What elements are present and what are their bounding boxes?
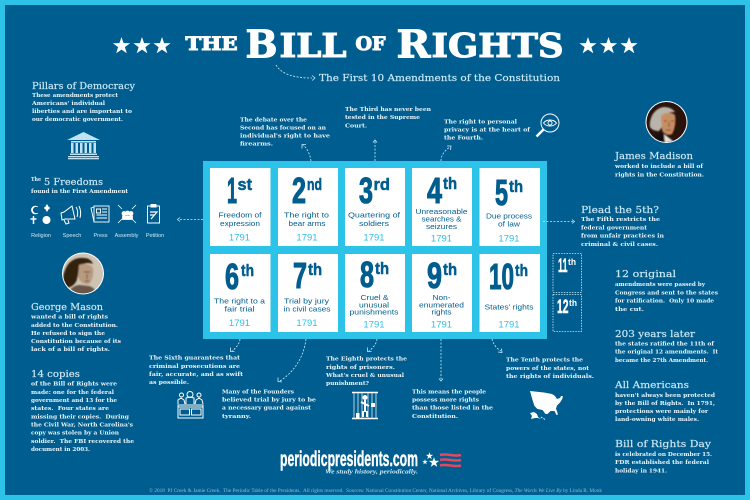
panel: George Mason: wanted a bill of rights [30,314,108,320]
card: 1st: 1 [227,170,237,211]
freedom labels [31,233,164,239]
arrow: first amendment to freedoms [178,218,203,222]
panel: James Madison: rights in the Constitution. [615,172,704,178]
card: 8th [345,254,405,332]
note: Sixth: fair, accurate, and as swift [149,372,243,378]
card: 8th: 1791 [363,320,385,330]
box: 12th: 12 [557,297,568,318]
card: 2nd: 2 [292,170,306,211]
freedom labels: Press [93,233,108,239]
panel: 12 original: 12 original [615,270,676,280]
panel: 12 original: amendments were passed by [615,282,706,288]
box: 11th [553,254,582,292]
card: 7th [278,254,338,332]
note: Ninth: Constitution. [412,414,458,420]
card: 9th: 1791 [431,320,452,330]
panel: 12 original: Congress and sent to the states [615,290,718,296]
panel: All Americans [614,381,715,423]
panel: 14 copies [31,370,134,453]
title: THE [186,33,238,55]
arrow: Fifth [543,220,574,224]
icon: prison cell [352,392,378,418]
note: Fourth [444,120,531,142]
panel: pillars of democracy: our democratic government. [32,117,123,123]
panel: 14 copies: government and 13 for the [31,398,117,404]
panel: George Mason: Constitution because of its [31,339,121,345]
panel: pillars of democracy: liberties and are important to [32,109,132,115]
card: 4th: 4 [427,170,442,211]
note: Seventh [222,390,316,420]
panel: 5 freedoms: 5 Freedoms [44,178,103,188]
card: 5th [480,168,540,246]
box: 12th [553,294,582,332]
title: B [246,22,278,66]
note: Eighth: The Eighth protects the [326,356,407,362]
card: 8th: punishments [350,308,399,317]
card: 1st: 1791 [229,232,250,244]
icon: religion [30,204,50,224]
panel: 14 copies: states. Four states are [31,406,109,412]
panel: Plead the 5th: criminal & civil cases. [581,242,658,248]
card: 2nd: nd [307,175,322,194]
footer credits: © 2018 PJ Creek & Jamie Creek. The Periodic Table of the Presidents. All rights reserved. Sources: National Constitution Center, National Archives, Library of Congress, The Words We Live By by Linda R. Monk [149,487,602,494]
arrow: Eighth [368,339,377,352]
panel: Plead the 5th: from unfair practices in [581,234,664,240]
card: 10th: 10 [489,256,514,297]
panel: 14 copies: document in 2003. [31,447,90,453]
logo [280,448,461,476]
card: 4th [412,168,472,246]
panel: George Mason: added to the Constitution. [31,323,118,329]
panel: 203 years later [615,330,718,364]
freedom labels: Assembly [115,233,139,239]
note: Fourth: privacy is at the heart of [444,128,531,134]
card: 4th: searches & [422,214,462,224]
title: OF [356,33,386,55]
arrow: Seventh [278,339,306,382]
card: 9th: rights [432,308,452,317]
panel: George Mason: lack of a bill of rights. [31,347,110,353]
card: 3rd: 3 [359,170,373,211]
logo stripes [440,454,461,466]
card: 7th: 7 [293,255,307,296]
panel: Bill of Rights Day [615,440,712,474]
note: Seventh: tyranny. [222,414,251,420]
card: 6th: 1791 [229,318,250,329]
panel: 12 original: for ratification. Only 10 made [615,298,714,304]
card: 5th: of law [498,220,521,229]
portrait: George Mason [62,252,104,296]
note: Eighth: rights of prisoners. [326,365,395,371]
card: 1st: st [238,175,252,194]
card: 10th: States' rights [484,302,534,312]
card: 6th: 6 [225,256,239,297]
card: 9th: enumerated [419,300,464,309]
note: Ninth: possess more rights [412,398,479,404]
card: 2nd: 1791 [296,232,318,244]
panel: pillars of democracy [31,82,136,123]
note: Sixth [149,356,243,386]
panel: pillars of democracy: Pillars of Democracy [32,82,136,92]
panel: Bill of Rights Day: FDR established the federal [615,460,710,466]
panel: pillars of democracy: Americans' individual [31,101,106,107]
arrow: Ninth [439,339,443,381]
arrow: Third [373,140,377,161]
panel: All Americans: by the Bill of Rights. In 1791, [615,401,715,407]
card: 10th [480,254,540,332]
card: 2nd: The right to [284,210,329,220]
card: 3rd: rd [374,175,390,194]
note: Ninth: This means the people [412,390,486,396]
panel: All Americans: protections were mainly for [615,409,709,415]
card: 6th: th [241,261,254,280]
panel: amendments table [203,161,547,339]
note: Sixth: as possible. [149,380,189,386]
card: 2nd [278,168,338,246]
note: Tenth [506,358,594,380]
card: 6th: The right to a [214,296,266,306]
logo: We study history, periodically. [325,468,418,476]
note: Ninth: than those listed in the [412,406,493,412]
card: 1st: expression [220,219,260,228]
freedom labels: Petition [146,233,164,239]
panel: 12 original [615,270,718,313]
panel: Bill of Rights Day: is celebrated on December 15. [615,452,712,458]
logo stars [422,452,439,467]
icon: press [91,206,109,222]
note: Second: individual's right to have [240,134,330,140]
freedom labels: Speech [63,233,81,239]
icon: speech [61,206,81,224]
freedom labels: Religion [31,233,51,239]
portrait: James Madison [646,101,688,143]
note: Sixth: The Sixth guarantees that [149,356,240,362]
panel: Bill of Rights Day: holiday in 1941. [615,468,667,474]
panel: James Madison [614,152,704,178]
icon: temple [67,132,100,159]
card: 7th: th [308,260,322,279]
note: Seventh: believed trial by jury to be [222,398,316,404]
note: Sixth: criminal prosecutions are [149,364,240,370]
panel: 14 copies: the Civil War, North Carolina's [31,422,133,428]
note: Ninth [412,390,493,420]
card: 8th: unusual [359,300,389,309]
note: Third: Court. [345,124,367,130]
panel: 5 freedoms [30,177,164,239]
panel: 14 copies: 14 copies [31,370,80,380]
panel: 5 freedoms: The [31,177,41,183]
card: 4th: 1791 [431,234,452,244]
arrow: Fourth [441,146,451,161]
panel: James Madison: worked to include a bill of [614,164,704,170]
title [113,22,638,66]
card: 2nd: bear arms [288,219,326,228]
panel: George Mason: George Mason [31,303,103,313]
note: Second: Second has focused on an [240,126,326,132]
card: 5th: 5 [495,172,508,213]
note: Eighth [325,356,407,387]
panel: 14 copies: missing their copies. During [31,414,129,420]
panel: James Madison: James Madison [614,152,693,162]
panel: George Mason: He refused to sign the [31,331,105,337]
card: 7th: 1791 [296,318,318,329]
panel: 203 years later: became the 27th Amendment. [615,358,708,364]
icon: petition [148,204,160,223]
note: Tenth: the rights of individuals. [506,374,594,380]
icon: assembly [118,205,136,223]
note: Seventh: Many of the Founders [222,390,294,396]
card: 6th: fair trial [224,304,255,314]
panel: 14 copies: copy was stolen by a Union [31,430,119,436]
card: 9th [412,254,472,332]
card: 3rd [345,168,405,246]
note: Third [345,107,431,130]
card: 3rd: 1791 [363,232,385,244]
box: 12th: th [569,298,577,308]
box: 11th: th [568,257,576,267]
title: IGHTS [432,26,564,65]
card: 6th [210,254,270,332]
arrow: Sixth [230,339,240,352]
title: ILL [280,26,346,65]
panel: 14 copies: soldier. The FBI recovered the [31,439,134,445]
note: Third: tested in the Supreme [345,115,420,121]
panel: Bill of Rights Day: Bill of Rights Day [615,440,712,450]
note: Third: The Third has never been [345,107,431,113]
note: Second [240,118,330,148]
note: Eighth: punishment? [326,381,370,387]
card: 7th: Trial by jury [284,296,329,306]
card: 9th: Non- [432,293,451,302]
panel: All Americans: land-owning white males. [615,417,699,423]
card: 10th: 1791 [498,320,520,330]
card: 9th: 9 [427,255,442,296]
panel: Plead the 5th [581,206,664,248]
panel: 203 years later: the states ratified the 11th of [615,342,715,348]
note: Tenth: powers of the states, not [506,366,589,372]
card: 8th: th [375,259,389,278]
icon: magnifier eye [536,114,559,136]
panel: All Americans: All Americans [614,381,689,391]
card: 4th: Unreasonable [416,207,468,216]
logo: periodicpresidents.com [280,448,418,471]
panel: All Americans: haven't always been protected [615,393,715,399]
panel: George Mason [30,303,121,353]
title: R [396,22,431,66]
note: Tenth: The Tenth protects the [506,358,583,364]
note: Fourth: The right to personal [444,120,518,126]
card: 10th: th [515,261,528,280]
note: Second: The debate over the [240,118,307,124]
card: 8th: Cruel & [360,293,389,302]
icon: jury [178,392,203,418]
card: 9th: th [443,260,457,279]
icon: USA map [530,391,563,420]
card: 4th: th [443,174,457,193]
card: 7th: in civil cases [284,304,331,314]
panel: 12 original: the cut. [615,307,644,313]
card: 8th: 8 [360,254,374,295]
note: Seventh: a necessary guard against [222,406,311,412]
left stars [113,37,171,53]
card: 5th: th [509,177,523,196]
panel: Plead the 5th: federal government [581,226,647,232]
note: Second: firearms. [240,142,273,148]
panel: 5 freedoms: found in the First Amendment [31,189,128,195]
panel: pillars of democracy: These amendments protect [32,93,118,99]
panel: Plead the 5th: Plead the 5th? [581,206,659,216]
card: 4th: seizures [426,222,457,231]
subtitle: The First 10 Amendments of the Constitution [319,74,560,84]
box: 11th: 11 [558,256,568,277]
card: 1st [210,168,270,246]
card: 5th: 1791 [498,234,520,244]
panel: 14 copies: made: one for the federal [31,390,115,396]
panel: Plead the 5th: The Fifth restricts the [581,217,660,223]
panel: 203 years later: the original 12 amendments. It [615,350,718,356]
note: Eighth: What's cruel & unusual [325,373,405,379]
panel: 203 years later: 203 years later [615,330,696,340]
arrow: Second [302,144,311,161]
arrow: Tenth [492,339,502,352]
card: 3rd: soldiers [359,219,389,228]
subtitle [276,65,560,84]
card: 3rd: Quartering of [348,210,401,220]
note: Fourth: the Fourth. [444,136,483,142]
panel: 14 copies: of the Bill of Rights were [31,382,117,388]
card: 1st: Freedom of [218,210,263,220]
card: 5th: Due process [486,212,532,220]
right stars [579,37,638,53]
